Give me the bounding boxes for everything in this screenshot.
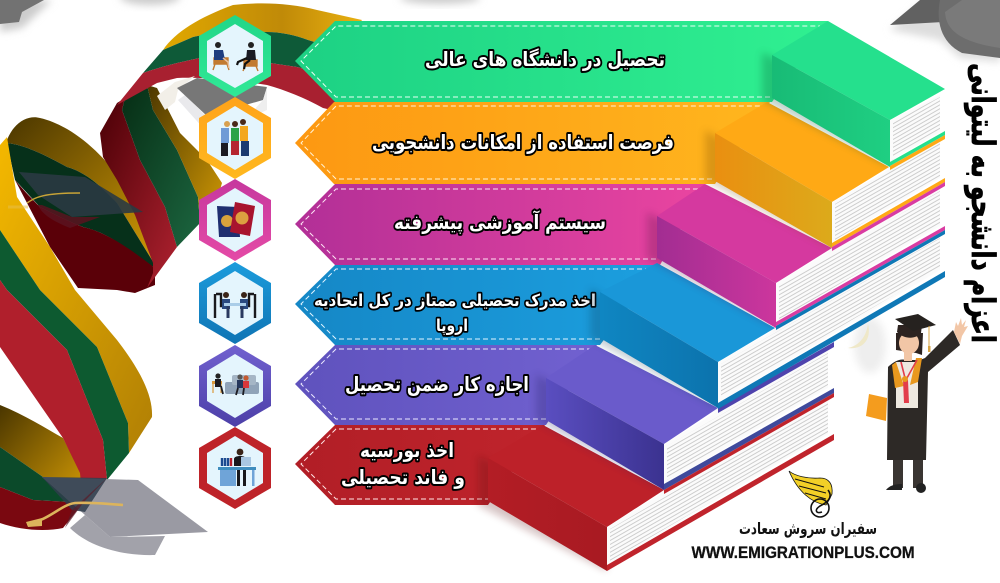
- banner 4 text: اخذ مدرک تحصیلی ممتاز در کل اتحادیه: [314, 291, 596, 310]
- icon: two people seated: [213, 42, 258, 71]
- book 3: magenta: [647, 184, 945, 330]
- icon: three students: [221, 119, 249, 156]
- hexagon 6: office desk icon: [199, 427, 271, 509]
- graduate student figure: [866, 314, 968, 493]
- student shirt and stole: [892, 358, 922, 408]
- icon: man at desk: [218, 449, 256, 486]
- student gown: [887, 330, 960, 460]
- banner 3 text: سیستم آموزشی پیشرفته: [394, 210, 606, 234]
- banner 4: blue: اروپا: [436, 316, 468, 336]
- icon: passports: [217, 202, 255, 237]
- hexagon 1: interview icon: [199, 15, 271, 97]
- grey graduation cap bottom left: [26, 477, 208, 555]
- hexagon 4: meeting icon: [199, 262, 271, 344]
- banner 1: green: [295, 21, 828, 102]
- student hand: [954, 318, 968, 344]
- ribbon: front band: [0, 137, 152, 503]
- logo name: سفیران سروش سعادت: [739, 519, 877, 538]
- banner 5 text: اجازه کار ضمن تحصیل: [345, 373, 529, 396]
- ribbon in flag colours: [0, 3, 362, 530]
- banner 6: red: و فاند تحصیلی: [341, 466, 465, 489]
- ribbon: second loop: [100, 85, 222, 288]
- grey cap top left: [0, 0, 52, 32]
- book 1: green: [762, 21, 945, 170]
- student head and hair: [896, 325, 923, 361]
- banner 6 text: اخذ بورسیه: [360, 439, 454, 462]
- ribbon: top band: [117, 3, 362, 112]
- website url: WWW.EMIGRATIONPLUS.COM: [692, 544, 914, 562]
- icon: people on sofa: [212, 373, 259, 395]
- book 2: orange: [705, 102, 945, 251]
- banner 3: magenta: [295, 184, 705, 265]
- banner 2 text: فرصت استفاده از امکانات دانشجویی: [372, 131, 674, 154]
- mortarboard on ribbon: [8, 172, 143, 228]
- hexagon 3: passports icon: [199, 179, 271, 261]
- banner 1 text: تحصیل در دانشگاه های عالی: [425, 48, 665, 71]
- ribbon: lower band: [0, 405, 107, 530]
- banner 2: orange: [295, 102, 770, 184]
- cap and book behind hexagons: [157, 76, 267, 130]
- student hat: [895, 314, 936, 352]
- ribbon: left loop inner side: [7, 117, 155, 293]
- logo: [692, 471, 914, 562]
- hexagon 2: students icon: [199, 97, 271, 179]
- banner 5: purple: [295, 345, 597, 425]
- banner 6: red: [295, 425, 545, 505]
- book 5: purple: [536, 342, 834, 494]
- logo icon: wing and swirl: [789, 471, 832, 517]
- background: blurred graduation cap shadows: [120, 0, 886, 373]
- banner 4: blue: [295, 265, 660, 345]
- book 4: blue: [590, 235, 945, 409]
- grey cap top right: [890, 0, 1000, 62]
- crescent decoration: [848, 324, 869, 348]
- book 6: red: [478, 394, 834, 571]
- student legs and shoes: [886, 458, 926, 493]
- hexagon 5: consultation icon: [199, 345, 271, 427]
- student book: [866, 394, 887, 421]
- icon: two people at table: [215, 292, 255, 318]
